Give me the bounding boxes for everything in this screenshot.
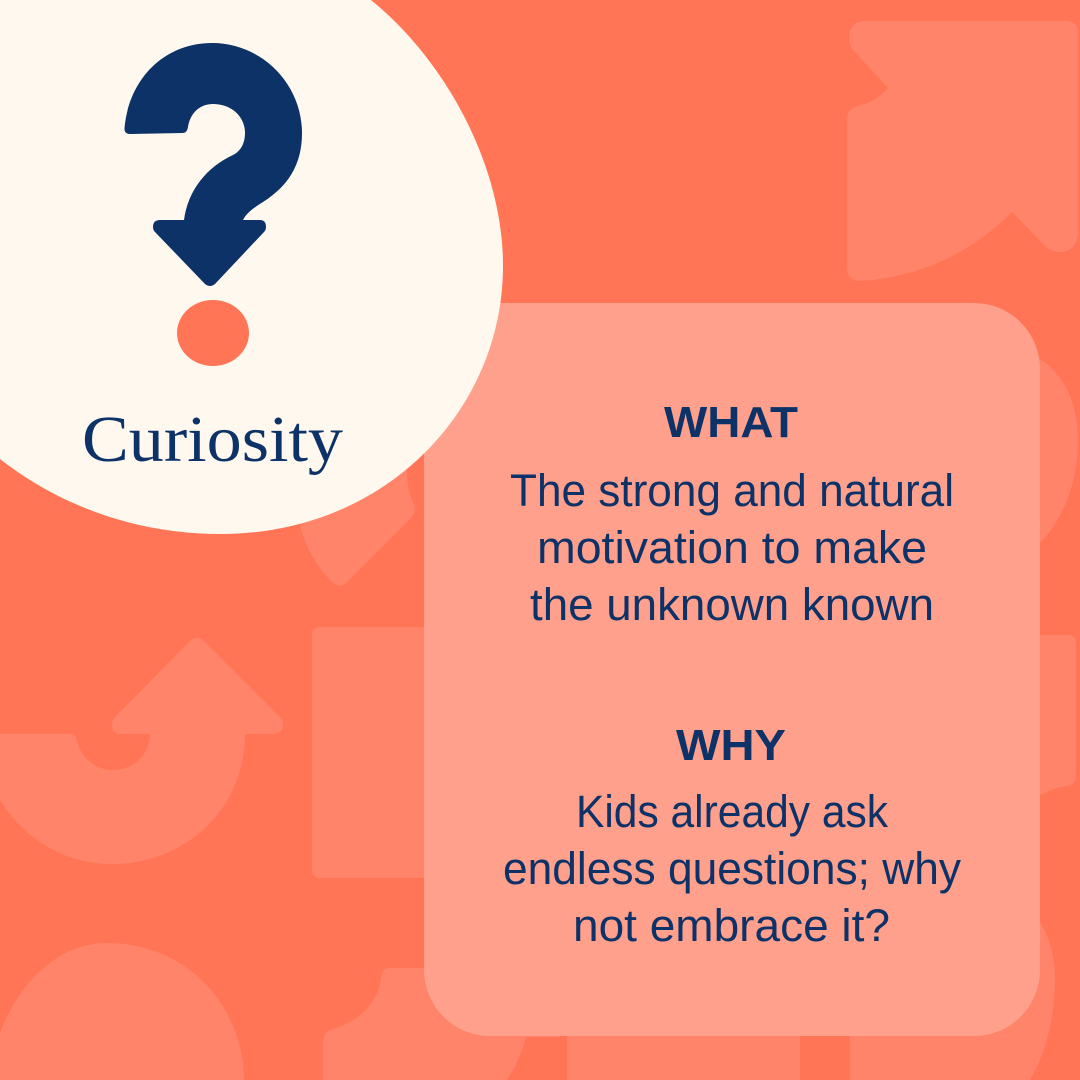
shape: square behind panel — [312, 627, 512, 878]
text: what description: The strong and natural — [510, 465, 954, 516]
block: what — [510, 398, 954, 630]
panel: cream blob with title — [0, 0, 503, 534]
shape: arrow tip under cream blob — [300, 470, 415, 586]
icon: coral dot — [177, 300, 249, 366]
shape: notched block bottom centre — [323, 968, 560, 1080]
shape: bottom right curved block — [850, 880, 1055, 1080]
text: why description — [503, 786, 961, 951]
shape: bottom block under panel — [567, 1000, 800, 1080]
text: what description: the unknown known — [530, 579, 934, 630]
text: why description: endless questions; why — [503, 843, 961, 894]
shape: right rounded block — [1000, 635, 1076, 800]
title: Curiosity — [82, 403, 343, 476]
shape: curved up arrow bottom left — [0, 638, 283, 864]
block: why — [503, 721, 961, 951]
shape: right circle — [1000, 350, 1078, 560]
shape: dome bottom left — [0, 943, 244, 1080]
heading: what: WHAT — [664, 398, 798, 447]
icon: question mark arrow — [124, 43, 302, 366]
text: what description: motivation to make — [537, 522, 927, 573]
text: why description: not embrace it? — [573, 900, 890, 951]
text: why description: Kids already ask — [576, 786, 888, 837]
shape: top right arrow — [847, 21, 1078, 281]
heading: why: WHY — [676, 721, 786, 770]
text: what description — [510, 465, 954, 630]
panel: what and why card — [424, 303, 1040, 1036]
